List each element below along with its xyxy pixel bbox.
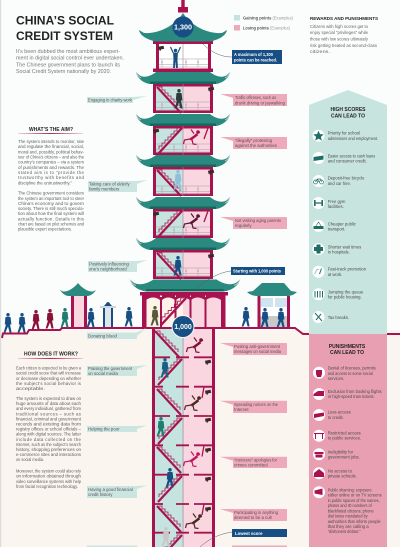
item: public services (328, 430, 361, 441)
text: how it works: e-commerce sites and interactions (16, 452, 82, 457)
label: traffic: drunk driving or jaywalking (235, 100, 286, 105)
falling people (184, 338, 203, 528)
text: aim of the system: moral and, possibly, political behav- (18, 149, 85, 154)
panel: high scores: HIGH SCORES (330, 107, 366, 113)
score badge 1,000 (172, 315, 194, 338)
text: how it works: history, shopping preferences on (16, 447, 82, 452)
item: licenses: and access to some social (328, 371, 373, 376)
icon: hand (313, 367, 325, 379)
text: aim of the system: chart are based on pilot schemes and (18, 222, 84, 226)
item: public shaming: blacklisted citizens; phone (328, 508, 374, 513)
item: flights (328, 389, 382, 399)
text: how it works: traditional sources – such as (16, 411, 82, 416)
base roof (130, 280, 240, 292)
text: how it works: records and existing data from (16, 422, 81, 426)
text: how it works: social credit score that will increase (16, 371, 82, 376)
item: schools (328, 468, 357, 479)
text: aim of the system: society. There is still much specula- (18, 206, 85, 211)
ground floor hall (140, 292, 228, 327)
text: how it works: the subject’s social behavior is (16, 381, 82, 386)
item: tax: Tax breaks. (328, 315, 349, 320)
item: hospitals: Shorter wait times (328, 244, 361, 249)
item: housing (328, 289, 364, 300)
label: praising (87, 365, 147, 376)
navy label: maximum: points can be reached. (234, 57, 277, 62)
label: posting: messages on social media (234, 349, 282, 354)
label: cut-off pink (232, 546, 287, 547)
text: how it works: or decrease depending on whether (16, 376, 82, 381)
item: school (328, 131, 378, 141)
label: neighborhood: Positively influencing (89, 262, 129, 267)
item: transport: transport. (328, 226, 345, 232)
item: promotion (328, 267, 367, 277)
icon: tax (312, 311, 324, 323)
item: public shaming: in public spaces of the names, (328, 498, 380, 503)
item: bicycle (328, 176, 365, 186)
item: bicycle: Deposit-free bicycle (328, 176, 365, 181)
label: protesting: “Illegally” protesting (235, 138, 273, 143)
icon: transport (312, 220, 324, 232)
navy label: lowest (200, 529, 287, 547)
item: credit (328, 410, 351, 420)
left edge (0, 0, 1, 547)
intro text: ment in digital social control ever undertaken. (16, 56, 124, 62)
floor 6 (153, 250, 214, 279)
item: hospitals (328, 244, 361, 254)
item: public shaming (328, 488, 382, 534)
navy label: starting: Starting with 1,000 points (233, 269, 282, 274)
text: how it works: Each citizen is expected to be given a (16, 366, 81, 371)
item: credit: to credit. (328, 415, 344, 420)
text: how it works: huge amounts of data about each (16, 401, 82, 406)
item: credit: Less access (328, 410, 351, 415)
text: aim of the system: the system an important tool to steer (18, 196, 84, 201)
panel: punishments: CAN LEAD TO (330, 350, 364, 356)
rewards and punishments text: risk getting treated as second-class (310, 43, 378, 48)
navy label: maximum: A maximum of 1,300 (234, 52, 274, 57)
item: school: Priority for school (328, 131, 360, 136)
registration kiosk (100, 302, 116, 327)
label: cut-off bottom (87, 546, 137, 547)
label: credit history: Having a good financial (88, 487, 133, 492)
navy label: starting (195, 267, 285, 290)
label: elderly (88, 180, 147, 192)
item: jobs: Ineligibility for (328, 449, 354, 454)
item: licenses (328, 366, 376, 381)
top roof (139, 13, 227, 42)
rewards and punishments text: citizens. (310, 49, 330, 54)
label: praising: on social media (88, 371, 118, 376)
text: aim of the system: trustworthy with benefits and (18, 175, 85, 180)
text: how it works: include data collected on the (16, 437, 82, 442)
text: aim of the system (18, 139, 85, 232)
person walking to pavilion (242, 307, 250, 326)
label: traffic (220, 94, 287, 106)
label: credit history (87, 486, 147, 498)
label: poor (87, 426, 147, 432)
climbing people (157, 358, 174, 546)
tower above ground (130, 0, 240, 327)
item: public shaming: authorities that inform people (328, 519, 381, 524)
icon: megaphone (313, 486, 325, 498)
label: credit history: credit history (88, 492, 113, 497)
label: poor: Helping the poor (88, 426, 120, 432)
item: licenses: services. (328, 376, 344, 381)
item: public shaming: that they are calling a (328, 524, 369, 529)
left pavilion (60, 283, 96, 327)
item: promotion: Fast-track promotion (328, 267, 367, 272)
item: jobs (328, 449, 360, 460)
label: apologies (220, 457, 287, 468)
title: CREDIT SYSTEM (16, 29, 113, 43)
text: aim of the system: stated aim is to “provide the (18, 170, 85, 175)
label: neighborhood (88, 260, 147, 272)
item: promotion: at work. (328, 272, 342, 277)
legend: Losing points (Examples) (243, 26, 291, 30)
item: public shaming: “dishonest debtor.” (328, 529, 361, 534)
item: bicycle: and car hire. (328, 181, 351, 186)
score badge 1,300: 1,300 (174, 23, 192, 32)
label: blood: Donating blood (88, 333, 118, 338)
text: aim of the system: country’s companies – via a system (18, 160, 84, 165)
text: how it works: on social media. (16, 457, 44, 462)
top floor (153, 41, 213, 72)
score badge 1,000: 1,000 (174, 324, 192, 331)
legend (234, 15, 294, 30)
navy label: lowest: Lowest score (235, 531, 263, 536)
text: aim of the system: The Chinese government considers (18, 191, 85, 196)
trap doors (202, 387, 212, 515)
title: CHINA’S SOCIAL (16, 14, 114, 28)
item: loans (328, 153, 375, 164)
label: apologies: “Insincere” apologies for (234, 458, 278, 462)
text: aim of the system: iour of China’s citizens – and also the (18, 154, 85, 160)
rewards and punishments text: enjoy special “privileges” while (310, 30, 368, 35)
label: apologies: crimes committed (234, 463, 268, 468)
item: housing: for public housing. (328, 295, 362, 300)
panel: punishments (309, 334, 387, 547)
label: protesting (220, 137, 287, 149)
item: loans: Easier access to cash loans (328, 153, 375, 158)
intro text: Social Credit System nationally by 2020. (16, 69, 111, 75)
label: cult: deemed to be a cult (234, 515, 273, 520)
text: how it works: on information obtained through (16, 474, 82, 479)
background lower (0, 330, 400, 547)
heading: what's the aim: WHAT’S THE AIM? (29, 127, 73, 133)
icon: dumbbell (312, 197, 324, 209)
icon: bicycle (312, 175, 324, 187)
label: elderly: family members (89, 187, 119, 192)
navy label: maximum (203, 44, 282, 64)
item: loans: and consumer credit. (328, 158, 367, 164)
panel: high scores (309, 90, 387, 334)
item: gym (328, 199, 346, 209)
score badge 1,300 (172, 16, 194, 38)
text: aim of the system: and regulate the financial, social, (18, 144, 84, 149)
text: how it works: video surveillance systems with help (16, 479, 82, 484)
tower basement (152, 329, 215, 547)
basement floors (155, 357, 212, 533)
label: posting (220, 343, 287, 355)
item: licenses: Denial of licenses, permits (328, 366, 376, 371)
text: how it works: along with digital sources. The latter (16, 432, 81, 437)
item: gym: facilities. (328, 204, 344, 209)
label: protesting: against the authorities (235, 143, 277, 148)
label: cult (220, 509, 287, 521)
panel: punishments: PUNISHMENTS (329, 344, 366, 350)
label: parents: Not visiting aging parents (235, 218, 281, 223)
label: charity (87, 96, 147, 103)
rewards and punishments text: REWARDS AND PUNISHMENTS (310, 16, 378, 21)
icon: medical cross (312, 243, 324, 255)
text: aim of the system: of punishments and rewards. The (18, 165, 85, 170)
item: gym: Free gym (328, 199, 346, 204)
icon: train (313, 388, 325, 400)
item: public services: Restricted access (328, 430, 361, 436)
background upper (0, 0, 400, 330)
text: how it works: Internet, such as the subject’s search (16, 442, 81, 447)
label: elderly: Taking care of elderly (89, 182, 130, 187)
queue of people (4, 307, 133, 332)
label: rumors (220, 401, 287, 413)
text: aim of the system: actually function. Details in this (18, 216, 85, 221)
item: public shaming: Public shaming: exposure (328, 488, 372, 492)
heading: what's the aim (18, 127, 83, 134)
label: neighborhood: one’s neighborhood (89, 267, 127, 272)
text: aim of the system: discipline the untrustworthy.” (18, 180, 73, 185)
item: hospitals: in hospitals. (328, 250, 350, 254)
rewards and punishments text: those with low scores ultimately (310, 36, 369, 41)
item: flights: Exclusion from booking flights (328, 389, 382, 394)
label: posting: Posting anti-government (234, 344, 281, 349)
legend: Gaining points (Examples) (243, 16, 294, 20)
rewards and punishments text (310, 16, 378, 54)
icon: school (313, 467, 325, 479)
label: rumors: Spreading rumors on the (234, 402, 279, 407)
item: public shaming: either online or on TV screens (328, 493, 382, 498)
item: housing: Jumping the queue (328, 289, 364, 294)
item: jobs: government jobs. (328, 455, 360, 460)
intro text: It’s been dubbed the most ambitious experi- (16, 49, 120, 55)
intro text: The Chinese government plans to launch its (16, 62, 120, 68)
icon: credit (313, 409, 325, 421)
intro text (16, 49, 124, 75)
label: blood (87, 328, 146, 339)
spire (178, 0, 188, 12)
cameras (205, 360, 211, 512)
label: praising: Praising the government (88, 366, 133, 371)
text: aim of the system: tion about how the final system will (18, 211, 84, 216)
item: public shaming: dial tones mandated by (328, 514, 369, 519)
basement stairs (155, 331, 182, 547)
text: how it works: financial, criminal and government (16, 416, 82, 421)
ground line and plinth (2, 328, 400, 338)
floor 3 (153, 126, 213, 155)
text: how it works: registry offices or school officials – (16, 427, 82, 432)
text: aim of the system: plausible expert expectations. (18, 227, 72, 232)
floor 5 (153, 209, 213, 238)
floor 2 (153, 84, 214, 113)
label: parents (220, 217, 287, 229)
icon: cash (312, 152, 324, 164)
item: transport (328, 221, 356, 232)
icon: queue (312, 288, 324, 300)
item: flights: or high-speed train tickets. (328, 394, 375, 399)
right pavilion (247, 283, 297, 328)
label: traffic: Traffic offenses, such as (235, 95, 276, 100)
item: school: admissions and employment. (328, 136, 378, 141)
icon: star (312, 130, 324, 142)
title (16, 14, 114, 43)
item: transport: Cheaper public (328, 221, 356, 226)
item: schools: private schools. (328, 474, 357, 479)
text: aim of the system: The system intends to monitor, rate (18, 139, 85, 144)
heading: how does it work (18, 352, 83, 359)
icon: barrier (313, 430, 325, 442)
roofs (136, 72, 230, 250)
text: how it works: acceptable. (16, 386, 45, 391)
text: aim of the system: China’s economy and to govern (18, 201, 85, 206)
label: rumors: Internet (234, 407, 249, 412)
rewards and punishments text: Citizens with high scores get to (310, 24, 368, 29)
icon: government (313, 448, 325, 460)
text: how it works: and every individual, gathered from (16, 406, 81, 411)
label: parents: regularly (235, 223, 252, 228)
icon: promotion (312, 266, 324, 278)
item: public shaming: photos and ID numbers of (328, 503, 372, 508)
text: how it works: Moreover, the system could also rely (16, 469, 82, 474)
heading: how does it work: HOW DOES IT WORK? (24, 352, 78, 358)
text: how it works: The system is expected to draw on (16, 396, 82, 401)
item: schools: No access to (328, 468, 353, 474)
floor 4 (153, 167, 214, 196)
text: how it works: from facial recognition technology. (16, 484, 78, 489)
label: cult: Participating in anything (234, 510, 279, 515)
text: how it works (16, 366, 82, 489)
panel: high scores: CAN LEAD TO (331, 114, 365, 120)
label: charity: Engaging in charity work (88, 98, 133, 103)
item: public services: to public services. (328, 436, 361, 441)
